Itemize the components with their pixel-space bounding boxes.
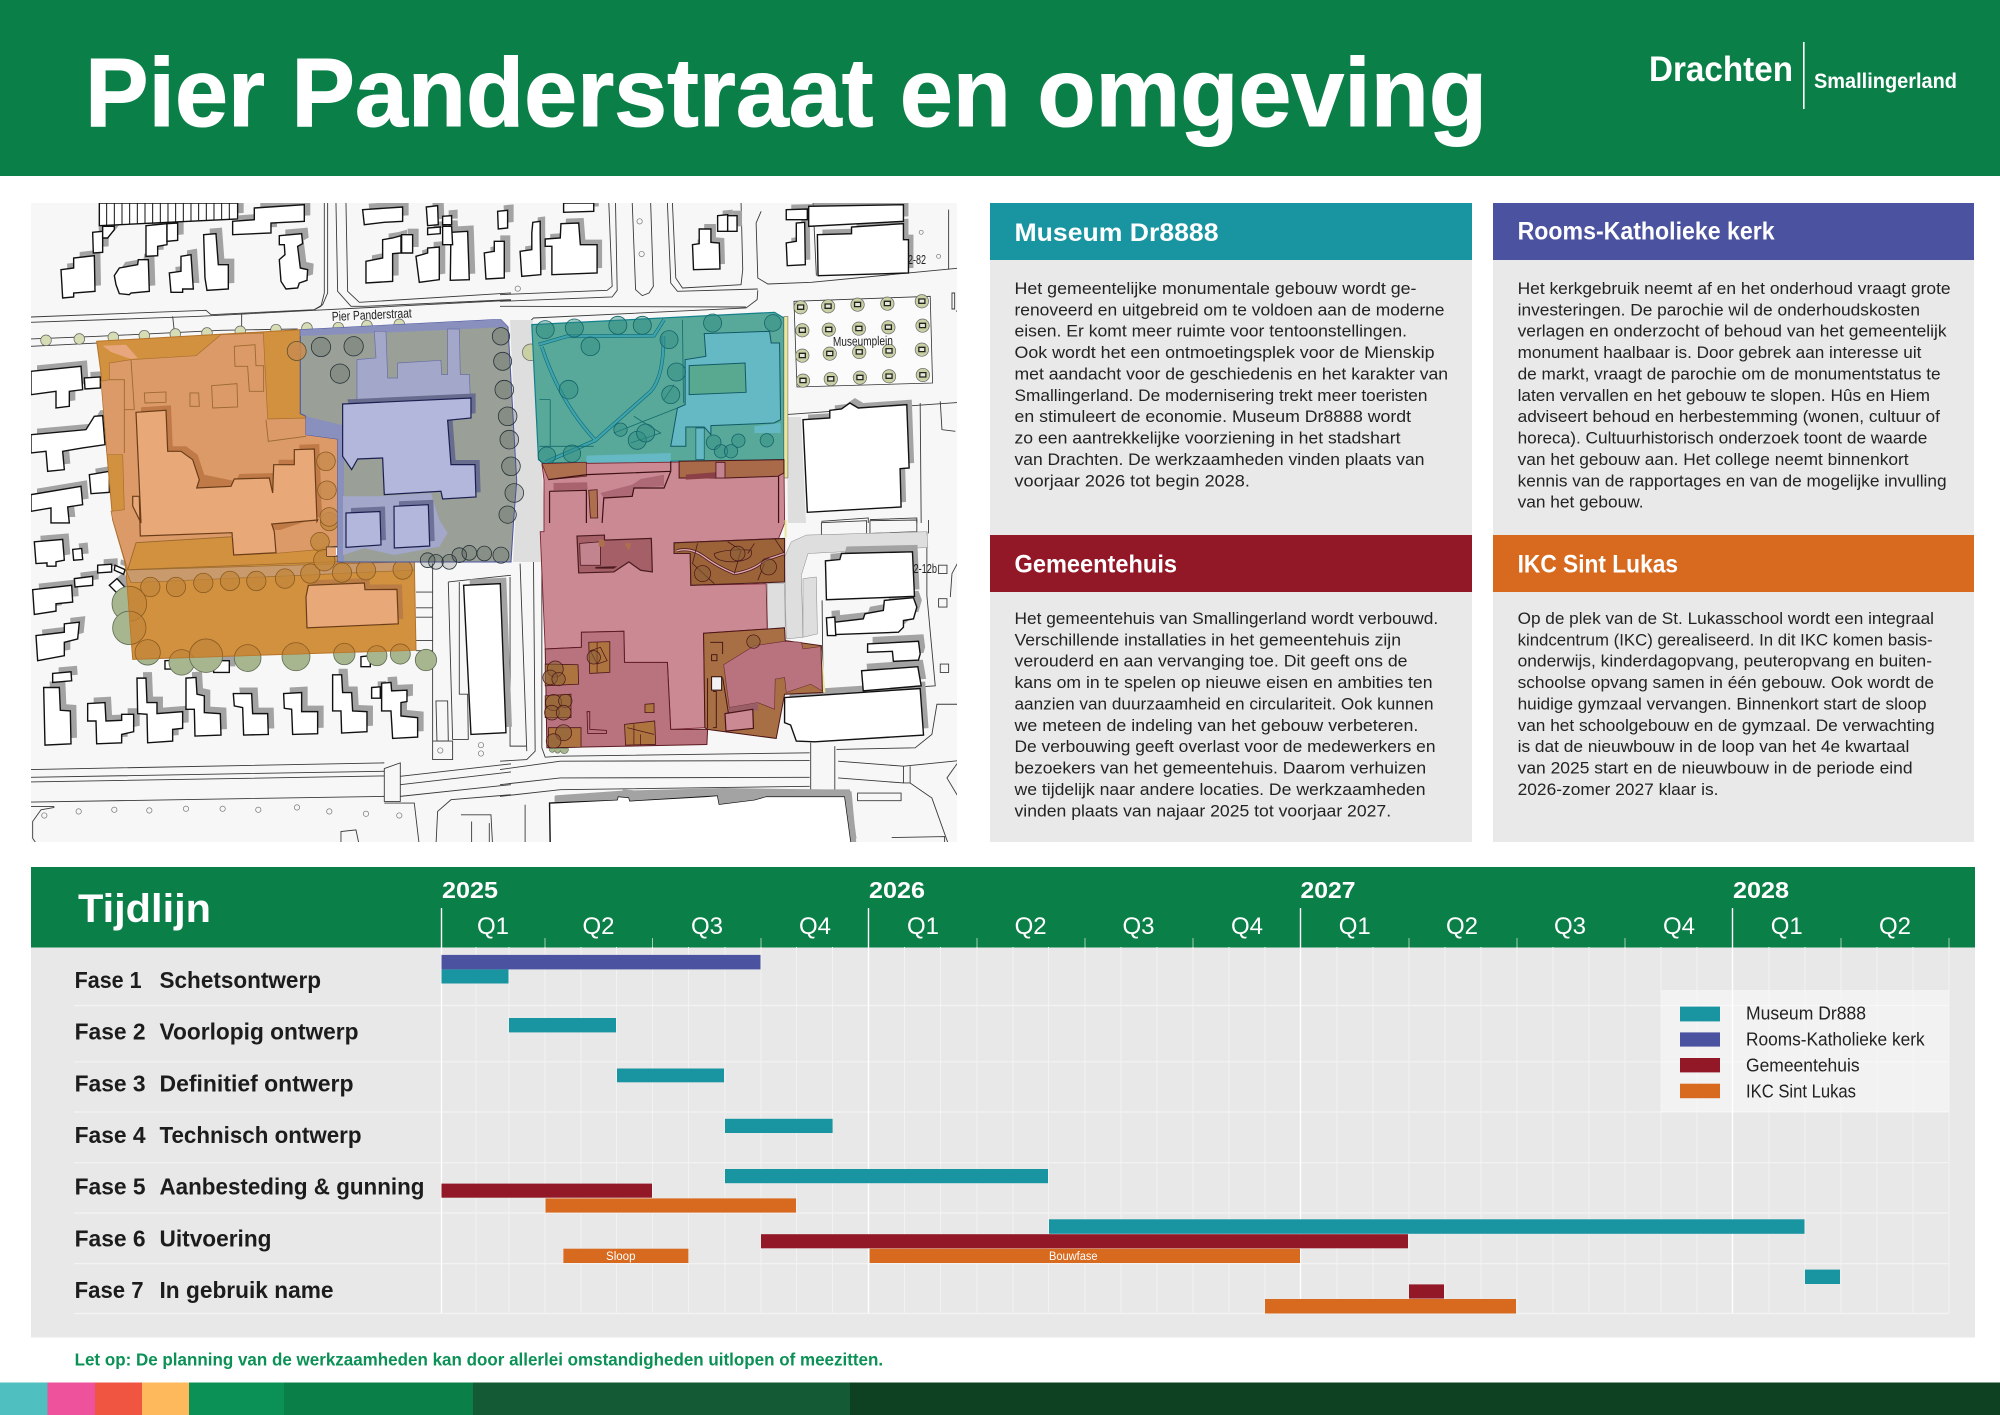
quarter labels: Q1 [1339,913,1371,940]
panel: Rooms-Katholieke kerk: de markt, vraagt de parochie om de monumentstatus te [1518,364,1941,384]
row houses stripes [107,203,229,225]
panel: Museum Dr8888: met aandacht voor de geschiedenis en het karakter van [1014,364,1448,384]
panel: IKC Sint Lukas: onderwijs, kinderdagopvang, peuteropvang en buiten- [1518,652,1932,671]
panel: Rooms-Katholieke kerk: laten vervallen en het gebouw te slopen. Hûs en Hiem [1518,386,1930,405]
quarter labels: Q1 [477,913,509,940]
panel: Museum Dr8888: zo een aantrekkelijke voorziening in het stadshart [1014,429,1401,448]
zone: Rooms-Katholieke kerk (blue) [287,320,524,569]
quarter labels: Q2 [582,913,615,940]
panel: Gemeentehuis: Gemeentehuis [1014,550,1177,578]
phase labels: Technisch ontwerp [160,1122,362,1148]
panel: Rooms-Katholieke kerk: kennis van de rapportages en van de mogelijke invulling [1518,471,1947,490]
logo: Drachten Smallingerland: Smallingerland [1814,70,1957,93]
phase labels: Voorlopig ontwerp [160,1019,358,1045]
phase labels: Fase 6 [75,1225,146,1251]
quarter labels: Q4 [1231,913,1263,940]
panel: Gemeentehuis: verouderd en aan vervanging toe. Dit geeft ons de [1014,652,1408,671]
panel: Museum Dr8888: renoveerd en uitgebreid om te voldoen aan de moderne [1014,300,1444,319]
museumplein square and trees [522,295,933,387]
panel: Gemeentehuis: Verschillende installaties in het gemeentehuis zijn [1014,630,1401,649]
building shadows [37,197,929,839]
quarter labels: Q1 [907,913,939,940]
grey side paths [510,320,928,639]
panel: Gemeentehuis: vinden plaats van najaar 2025 tot voorjaar 2027. [1014,801,1391,820]
map label: house number 2-12b: 2-12b [914,561,937,576]
quarter labels: Q3 [1554,913,1586,940]
small ring trees [42,219,941,818]
south office shadow [555,788,857,846]
panel: Rooms-Katholieke kerk: van het gebouw aan. Het college neemt binnenkort [1518,450,1909,469]
year labels [442,877,1789,903]
map label: Pier Panderstraat: Pier Panderstraat [331,305,412,324]
legend: IKC Sint Lukas [1746,1082,1856,1102]
phase labels: Fase 7 [75,1277,144,1303]
panel: Rooms-Katholieke kerk: horeca). Cultuurhistorisch onderzoek toont de waarde [1518,429,1927,448]
year labels: 2027 [1300,877,1356,903]
phase labels: Definitief ontwerp [160,1070,354,1096]
panel: IKC Sint Lukas: 2026-zomer 2027 klaar is. [1518,780,1718,799]
map label: house number 2-82: 2-82 [908,252,926,267]
zone: Gemeentehuis (red) [540,460,825,754]
quarter labels: Q2 [1446,913,1478,940]
phase labels: Fase 5 [75,1174,146,1200]
panel: Rooms-Katholieke kerk: van het gebouw. [1518,493,1644,512]
zone: Museum Dr8888 (teal) [532,312,788,478]
quarter labels: Q3 [691,913,723,940]
panel: Rooms-Katholieke kerk: Het kerkgebruik neemt af en het onderhoud vraagt grote [1518,279,1951,298]
panel: Gemeentehuis: bezoekers van het gemeentehuis. Daarom verhuizen [1014,759,1426,778]
gantt bars: IKC Sint Lukas [546,1198,1516,1314]
panel: IKC Sint Lukas: kindcentrum (IKC) gerealiseerd. In dit IKC komen basis- [1518,630,1933,649]
building footprints [31,203,924,846]
phase labels [75,967,424,1303]
quarter labels: Q1 [1771,913,1803,940]
panel: Gemeentehuis: we meteen de indeling van het gebouw verbeteren. [1013,716,1418,735]
quarter labels: Q2 [1879,913,1911,940]
gantt bars: IKC Sint Lukas: Bouwfase [1049,1251,1098,1263]
legend: Museum Dr888 [1746,1004,1866,1024]
panel: Gemeentehuis: kans om in te spelen op nieuwe eisen en ambities ten [1014,673,1432,692]
phase labels: Uitvoering [160,1225,272,1251]
header band [0,0,2000,176]
heading: Tijdlijn: Tijdlijn [78,887,211,931]
phase labels: Fase 1 [75,967,142,993]
phase labels: In gebruik name [160,1277,334,1303]
street trees [41,319,405,346]
panel: Museum Dr8888: eisen. Er komt meer ruimte voor tentoonstellingen. [1014,322,1407,341]
panel: IKC Sint Lukas: is dat de nieuwbouw in de loop van het 4e kwartaal [1518,737,1909,756]
footer colour band [0,1382,2000,1415]
panel: Museum Dr8888: Ook wordt het een ontmoetingsplek voor de Mienskip [1014,343,1434,362]
panel: Gemeentehuis: De verbouwing geeft overlast voor de medewerkers en [1014,737,1436,756]
trees inside IKC zone [127,452,413,660]
panel: IKC Sint Lukas: huidige gymzaal vervangen. Binnenkort start de sloop [1518,694,1927,714]
year labels: 2028 [1733,877,1789,903]
panel: Rooms-Katholieke kerk [1493,203,1974,535]
legend [1661,990,1949,1112]
logo: Drachten Smallingerland [1649,42,1957,109]
panel: Museum Dr8888: Het gemeentelijke monumentale gebouw wordt ge- [1014,279,1416,298]
legend: Rooms-Katholieke kerk [1746,1030,1926,1050]
panel: Museum Dr8888: van Drachten. De werkzaamheden vinden plaats van [1014,450,1424,469]
panel: Museum Dr8888: voorjaar 2026 tot begin 2028. [1014,471,1250,490]
quarter labels: Q2 [1015,913,1047,940]
quarter labels: Q4 [1663,913,1695,940]
quarter labels: Q4 [799,913,831,940]
panel: IKC Sint Lukas: van het schoolgebouw en de gymzaal. De verwachting [1518,716,1935,735]
panel: Museum Dr8888: en stimuleert de economie. Museum Dr8888 wordt [1014,407,1411,426]
gantt bar: Rooms-Katholieke kerk [442,955,760,969]
roads [31,203,960,846]
green trees around IKC [112,586,437,675]
panel: IKC Sint Lukas [1493,535,1974,842]
panel: Museum Dr8888: Smallingerland. De modernisering trekt meer toeristen [1014,386,1428,405]
quarter labels [477,913,1911,940]
panel: Rooms-Katholieke kerk: Rooms-Katholieke kerk [1518,218,1775,246]
gantt bars: Museum Dr8888 [442,969,1840,1284]
panel: Museum Dr8888 [990,203,1472,535]
note: planning disclaimer: Let op: De planning van de werkzaamheden kan door allerlei omstandigheden uitlopen of meezitten. [75,1350,883,1370]
legend: Gemeentehuis [1746,1056,1860,1076]
panel: timeline [31,867,1975,1338]
phase labels: Aanbesteding & gunning [160,1174,424,1200]
quarter labels: Q3 [1122,913,1155,940]
panel: IKC Sint Lukas: IKC Sint Lukas [1518,550,1678,578]
panel: Rooms-Katholieke kerk: adviseert behoud en herbestemming (wonen, cultuur of [1518,407,1940,426]
phase labels: Fase 2 [75,1019,146,1045]
panel: Gemeentehuis: we tijdelijk naar andere locaties. De werkzaamheden [1013,780,1426,799]
panel: Rooms-Katholieke kerk: monument haalbaar is. Door gebrek aan interesse uit [1518,343,1922,362]
panel: Gemeentehuis [990,535,1472,842]
panel: IKC Sint Lukas: Op de plek van de St. Lukasschool wordt een integraal [1518,609,1934,628]
panel: Gemeentehuis: aanzien van duurzaamheid en circulariteit. Ook kunnen [1014,694,1434,714]
panel: Rooms-Katholieke kerk: investeringen. De parochie wil de onderhoudskosten [1518,300,1920,319]
panel: Rooms-Katholieke kerk: verlagen en onderzocht of behoud van het gemeentelijk [1518,322,1947,341]
year labels: 2025 [442,877,498,903]
gantt bars: Gemeentehuis [442,1184,1444,1299]
phase labels: Fase 4 [75,1122,146,1148]
panel: Gemeentehuis: Het gemeentehuis van Smallingerland wordt verbouwd. [1014,609,1438,628]
title: Pier Panderstraat en omgeving [85,38,1487,147]
map label: Museumplein: Museumplein [833,333,893,349]
year labels: 2026 [869,877,925,903]
trees inside church plot [311,328,524,523]
panel: IKC Sint Lukas: van 2025 start en de nieuwbouw in de periode eind [1518,759,1913,778]
panel: Museum Dr8888: Museum Dr8888 [1014,219,1219,247]
logo: Drachten Smallingerland: Drachten [1649,50,1793,89]
phase labels: Fase 3 [75,1070,146,1096]
phase labels: Schetsontwerp [160,967,321,993]
zone: IKC Sint Lukas (orange) [97,330,416,675]
map: site plan with project zones [31,197,960,846]
panel: IKC Sint Lukas: schoolse opvang samen in één gebouw. Ook wordt de [1518,673,1934,692]
gantt bars: IKC Sint Lukas: Sloop [606,1251,636,1263]
